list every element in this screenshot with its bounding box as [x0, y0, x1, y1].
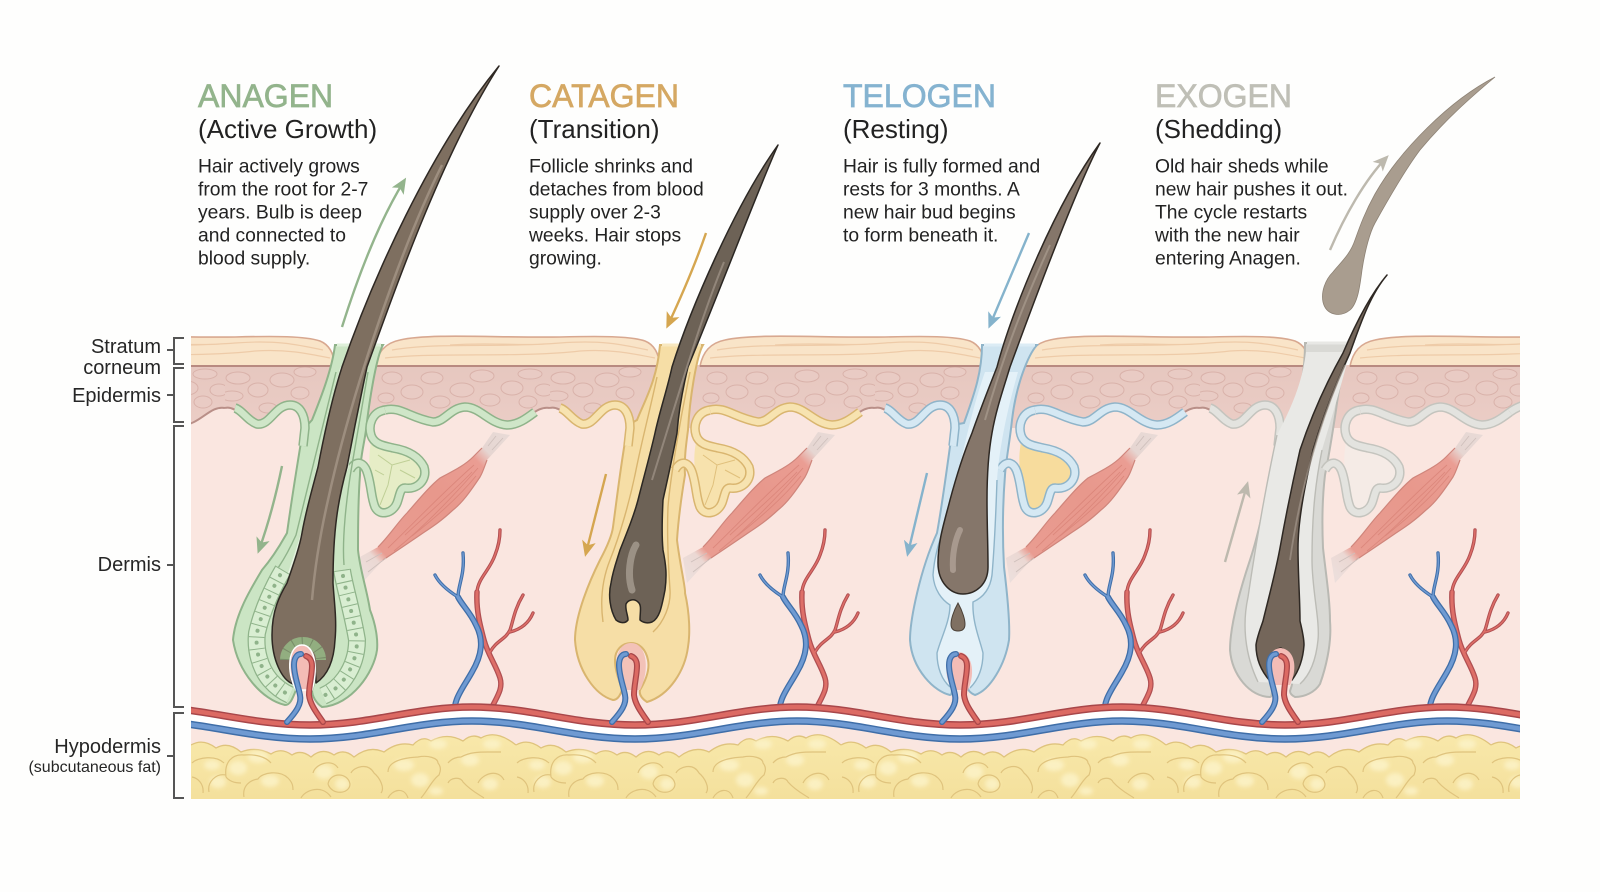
- stage: telogen follicle: [885, 143, 1185, 722]
- arrows: anagen growth direction: [259, 181, 404, 550]
- catagen inner sheath: [602, 372, 690, 632]
- text block: anagen: [198, 78, 377, 270]
- telogen sebaceous gland: [1019, 438, 1074, 512]
- anagen epidermal band right: [385, 407, 535, 425]
- text block: catagen: detaches from blood: [529, 180, 704, 200]
- exogen gland duct: [1325, 410, 1400, 513]
- layer labels: Epidermis: [72, 385, 161, 407]
- text block: exogen: EXOGEN: [1155, 78, 1292, 114]
- exogen capillary loop: [1262, 654, 1298, 722]
- panel: skin cross-section base: [0, 336, 1600, 802]
- stage: exogen follicle: [1210, 77, 1524, 722]
- anagen hair shaft and bulb: [272, 66, 499, 684]
- exogen papilla: [1267, 648, 1294, 685]
- text block: telogen: (Resting): [843, 114, 948, 144]
- exogen new hair shaft and bulb: [1256, 275, 1387, 681]
- layer labels: (subcutaneous fat): [28, 759, 161, 776]
- text block: catagen: growing.: [529, 248, 602, 270]
- arrector pili muscles: [358, 432, 1483, 583]
- anagen papilla: [290, 645, 315, 690]
- catagen gland duct: [675, 410, 750, 513]
- text block: anagen: from the root for 2-7: [198, 180, 368, 200]
- telogen capillary loop: [942, 654, 978, 722]
- text block: telogen: TELOGEN: [843, 78, 996, 114]
- text block: catagen: (Transition): [529, 114, 660, 144]
- text block: exogen: The cycle restarts: [1155, 202, 1307, 224]
- catagen papilla: [616, 643, 646, 690]
- text block: catagen: supply over 2-3: [529, 202, 661, 224]
- stage: catagen follicle: [560, 145, 860, 722]
- exogen follicle body: [1230, 343, 1353, 697]
- stratum corneum layer: [50, 336, 1600, 366]
- layer brackets: [167, 338, 184, 798]
- text block: exogen: [1154, 78, 1348, 270]
- text block: catagen: weeks. Hair stops: [528, 226, 681, 246]
- telogen epidermal band right: [1035, 407, 1185, 425]
- main blood vessels: [146, 707, 1600, 739]
- layer labels: Hypodermis: [54, 736, 161, 758]
- text block: telogen: rests for 3 months. A: [843, 180, 1020, 200]
- arrows: telogen direction: [908, 233, 1029, 553]
- exogen epidermal band left: [1210, 405, 1280, 446]
- telogen new hair bud: [951, 603, 965, 631]
- anagen gland duct: [350, 410, 425, 513]
- telogen epidermal band left: [885, 405, 955, 446]
- catagen epidermal band left: [560, 405, 630, 446]
- text block: telogen: Hair is fully formed and: [843, 156, 1040, 178]
- text block: telogen: [843, 78, 1040, 246]
- telogen gland duct: [1000, 410, 1075, 513]
- text block: catagen: [528, 78, 704, 270]
- anagen sebaceous gland: [369, 438, 424, 512]
- anagen follicle body: [233, 345, 383, 707]
- arrows: exogen direction: [1225, 158, 1386, 562]
- anagen capillary loop: [287, 654, 323, 722]
- text block: anagen: and connected to: [198, 226, 346, 246]
- text block: telogen: new hair bud begins: [843, 202, 1016, 224]
- catagen capillary loop: [612, 654, 648, 722]
- anagen epidermal band left: [235, 405, 305, 446]
- text block: anagen: ANAGEN: [198, 78, 333, 114]
- text block: anagen: blood supply.: [198, 248, 310, 270]
- text block: exogen: with the new hair: [1154, 226, 1300, 246]
- telogen hair shaft and club: [938, 143, 1100, 594]
- text block: anagen: Hair actively grows: [198, 156, 360, 178]
- anagen cell band: [257, 570, 357, 696]
- anagen inner sheath: [278, 368, 368, 600]
- text block: anagen: years. Bulb is deep: [198, 202, 362, 224]
- arrows: catagen direction: [586, 233, 706, 553]
- text block: exogen: new hair pushes it out.: [1155, 180, 1348, 200]
- telogen follicle body: [910, 345, 1037, 695]
- capillary branches: [435, 530, 1508, 718]
- text block: exogen: (Shedding): [1155, 114, 1282, 144]
- epidermis layer: [191, 365, 1520, 428]
- catagen sebaceous gland: [694, 438, 749, 512]
- telogen papilla: [946, 652, 972, 690]
- exogen sebaceous gland: [1344, 438, 1399, 512]
- dermis layer: [191, 408, 1520, 756]
- catagen follicle body: [575, 345, 703, 702]
- text block: exogen: entering Anagen.: [1155, 248, 1301, 270]
- text block: catagen: Follicle shrinks and: [529, 156, 693, 178]
- telogen inner sheath: [933, 372, 1018, 688]
- catagen epidermal band right: [710, 407, 860, 425]
- exogen inner sheath: [1245, 352, 1350, 684]
- layer labels: Stratum: [91, 336, 161, 358]
- text block: catagen: CATAGEN: [529, 78, 679, 114]
- layer labels: [28, 336, 161, 776]
- catagen hair shaft and club: [610, 145, 778, 623]
- exogen epidermal band right: [1360, 405, 1524, 425]
- exogen shed old hair: [1322, 77, 1495, 314]
- text block: telogen: to form beneath it.: [843, 226, 998, 246]
- layer labels: corneum: [83, 357, 161, 379]
- hypodermis fat cells: [191, 735, 1600, 802]
- layer labels: Dermis: [98, 554, 161, 576]
- stage: anagen follicle: [233, 66, 535, 722]
- text block: exogen: Old hair sheds while: [1155, 156, 1329, 178]
- text block: anagen: (Active Growth): [198, 114, 377, 144]
